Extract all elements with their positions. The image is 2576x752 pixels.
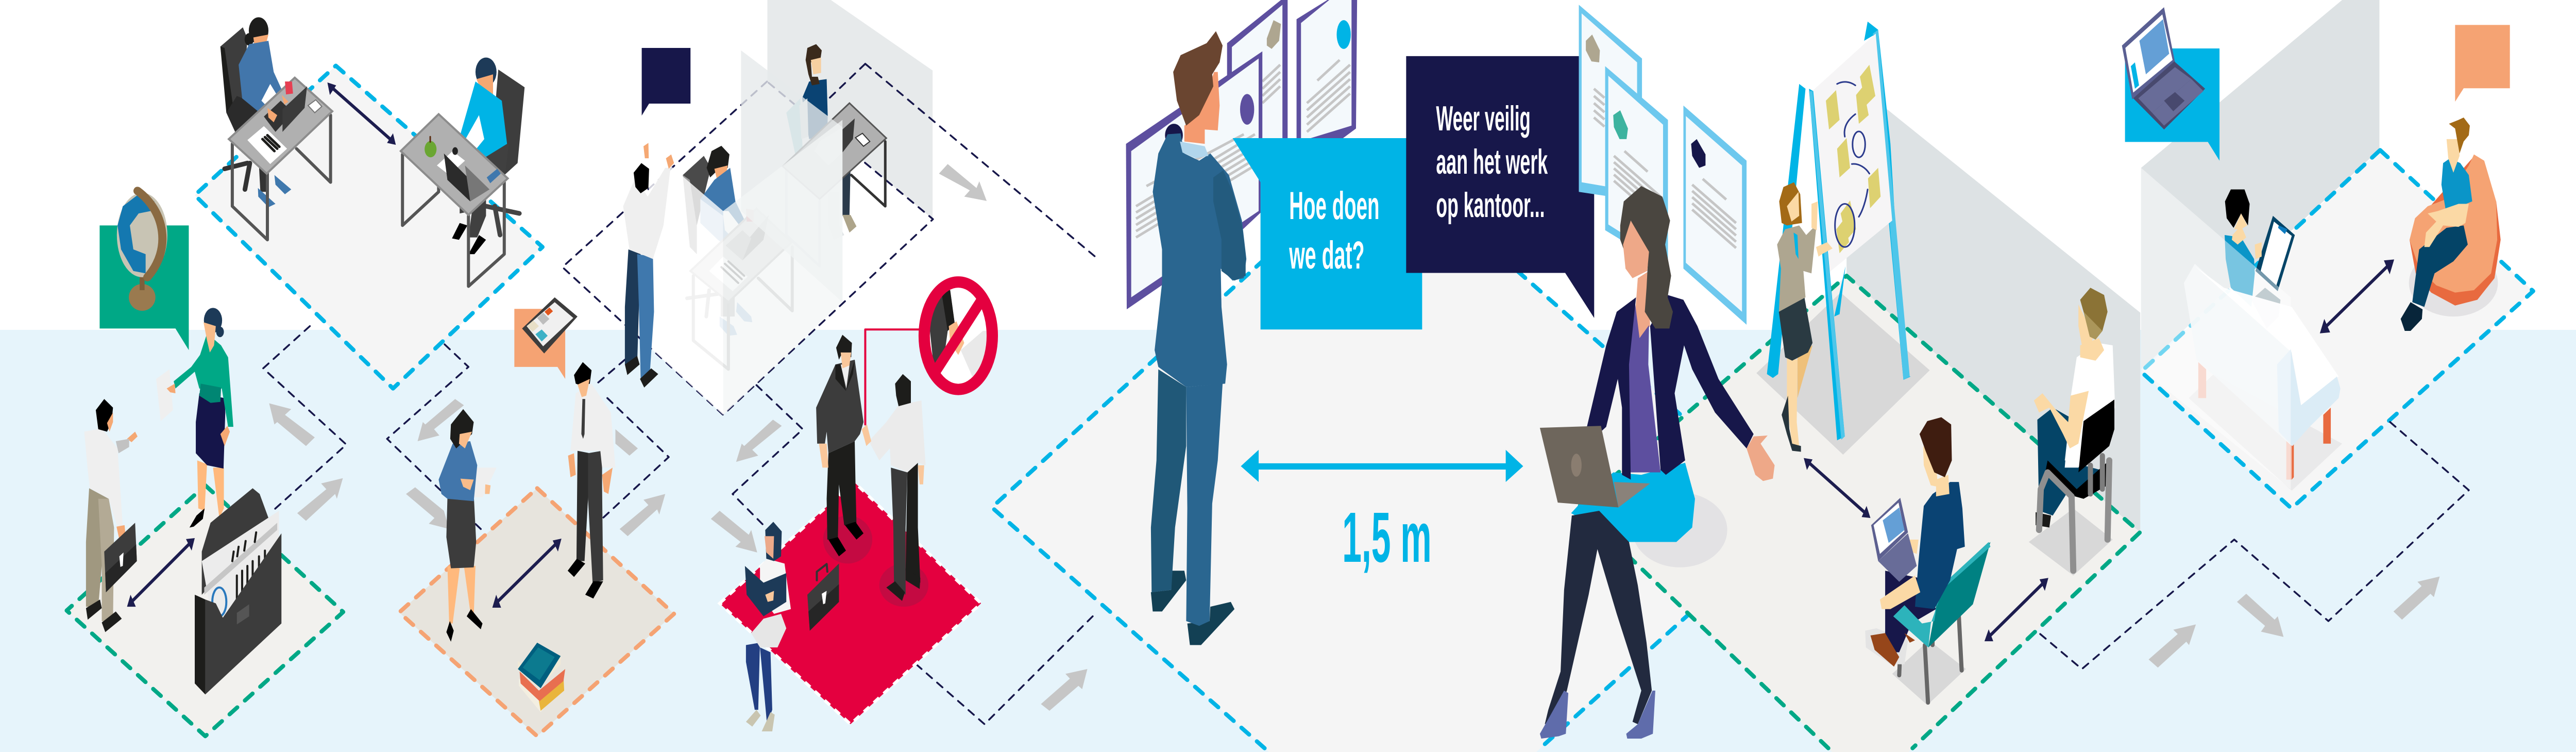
floor: green zone with folder — [66, 486, 343, 736]
person: woman with paper in grey skirt — [438, 409, 497, 642]
text: Weer veilig aan het werk op kantoor: aan het werk — [1436, 143, 1548, 182]
person: woman with clipboard on sofa — [2225, 190, 2295, 328]
documents on wall: light blue set — [1579, 5, 1747, 325]
callout: Weer veilig — [1406, 56, 1594, 318]
callout: green with globe — [99, 225, 189, 350]
document: front — [1605, 66, 1668, 269]
floor: blue lounge zone — [2141, 150, 2533, 508]
callout: peach with calculator — [514, 309, 565, 379]
person: man pointing at wall — [623, 143, 674, 388]
icon: laptop — [2122, 7, 2205, 129]
arrows: walking direction left — [269, 399, 464, 529]
callout: blue with laptop — [2125, 48, 2219, 161]
callout: peach — [2455, 25, 2510, 102]
wall: grey wall behind meeting zone — [1846, 77, 2140, 532]
arrows: walking direction right — [2148, 576, 2439, 667]
person: seated woman reading — [745, 522, 791, 731]
document: back middle — [1227, 0, 1287, 163]
text: Weer veilig aan het werk op kantoor: op kantoor... — [1436, 186, 1545, 225]
floor: peach zone — [399, 488, 674, 736]
floor: green meeting zone — [1578, 276, 2140, 752]
text: 1,5 m: 1,5 m — [1342, 498, 1432, 577]
text: Hoe doen we dat: Hoe doen — [1289, 185, 1379, 228]
route: dashed walkway right — [2039, 422, 2469, 669]
icon: folder with documents — [195, 488, 281, 694]
text: Hoe doen we dat — [1289, 185, 1379, 277]
desk: desk behind glass — [783, 103, 886, 266]
person: man on teal chair with laptop — [1865, 417, 1990, 703]
floor outline: green meeting zone dashes — [1578, 276, 2140, 748]
document: back — [1579, 5, 1642, 202]
document: back right — [1297, 0, 1357, 141]
route: dashed partition zone outline — [563, 64, 1095, 415]
arrow: distance green zone — [127, 538, 195, 607]
person: suited man shaking hands — [816, 335, 872, 563]
icon: calculator — [522, 297, 578, 354]
arrow: distance flip chart to man — [1804, 458, 1871, 518]
floor shadow: sofa — [2189, 374, 2342, 491]
person: man with briefcase — [84, 399, 138, 632]
person: woman at desk behind panel — [683, 146, 752, 336]
scene: meeting zone — [1540, 5, 2048, 739]
panel: translucent lounge wall — [2141, 168, 2291, 489]
arrow: 1.5 metre distance — [1241, 450, 1523, 482]
callout: Hoe doen we dat — [1233, 138, 1422, 329]
person: man in teal suit — [1151, 31, 1246, 645]
person: woman at desk blue sweater — [221, 17, 291, 207]
floor zones far right — [2029, 0, 2533, 669]
floor: red handshake carpet — [720, 482, 981, 724]
text: Weer veilig aan het werk op kantoor: Weer veilig — [1436, 99, 1531, 139]
floor: blue zone with desks — [195, 65, 543, 389]
person: woman in green handing paper — [156, 308, 233, 528]
person: woman at flip chart — [1777, 182, 1833, 452]
wall: grey wall behind partition desk — [767, 0, 933, 219]
scene: partition zone and handshake — [514, 44, 992, 731]
route: dashed walkway left — [263, 326, 484, 532]
floor: partition zone — [563, 81, 933, 415]
arrow: distance peach zone — [493, 539, 562, 608]
document: front left — [1126, 52, 1262, 309]
desk: left desk — [229, 78, 332, 240]
icon: briefcase on carpet — [807, 563, 839, 631]
documents on wall: purple set — [1126, 0, 1594, 645]
scene: desks and reception left — [84, 17, 562, 694]
person: man in white shirt shaking hands — [862, 374, 928, 607]
arrow: distance between chairs — [1985, 578, 2048, 641]
background ground band — [0, 330, 2576, 752]
arrow: distance lounge — [2320, 259, 2394, 333]
person: woman at desk cyan sweater — [452, 58, 524, 254]
icon: globe — [117, 191, 167, 311]
floor shadow: flip chart — [1756, 293, 1930, 455]
text: Hoe doen we dat: we dat? — [1289, 234, 1365, 277]
desk: desk with paper — [690, 209, 792, 369]
document: right — [1683, 106, 1747, 325]
text: Weer veilig aan het werk op kantoor — [1436, 99, 1548, 225]
floor zone: 1.5 m central — [992, 152, 1797, 752]
person: man in tie — [568, 362, 616, 598]
icon: no handshake sign — [924, 282, 992, 390]
floor shadow: teal chair — [1892, 640, 1966, 705]
person: seated woman with laptop — [1540, 186, 1775, 739]
floor outline: 1.5 m zone dashes — [992, 152, 1797, 748]
icon: flip chart — [1767, 22, 1911, 440]
panels: transparent glass screens — [648, 51, 842, 415]
furniture: white sofa — [2184, 264, 2341, 480]
floor shadow: chair right — [2029, 508, 2113, 576]
icon: laptop on lap — [1540, 426, 1650, 507]
indicator: red link line — [865, 329, 921, 424]
arrows: walking direction middle — [616, 164, 987, 553]
person: man on black chair — [2034, 288, 2115, 571]
desk: right desk — [401, 114, 508, 287]
callout: navy small — [642, 48, 690, 115]
floor zones middle-left section — [399, 0, 1095, 736]
person: bearded man behind glass — [786, 44, 856, 240]
icon: stack of books — [518, 643, 565, 712]
arrow: walking direction centre — [1041, 669, 1088, 711]
arrow: distance between desks — [327, 82, 396, 145]
person: woman on bean bag — [2401, 118, 2501, 331]
floor zones left section — [66, 65, 543, 736]
floor zones right section — [1578, 77, 2140, 752]
scene: lounge zone — [2034, 7, 2510, 571]
route: dashed walkway middle — [597, 360, 1095, 724]
wall: back wall lounge — [2141, 0, 2379, 369]
